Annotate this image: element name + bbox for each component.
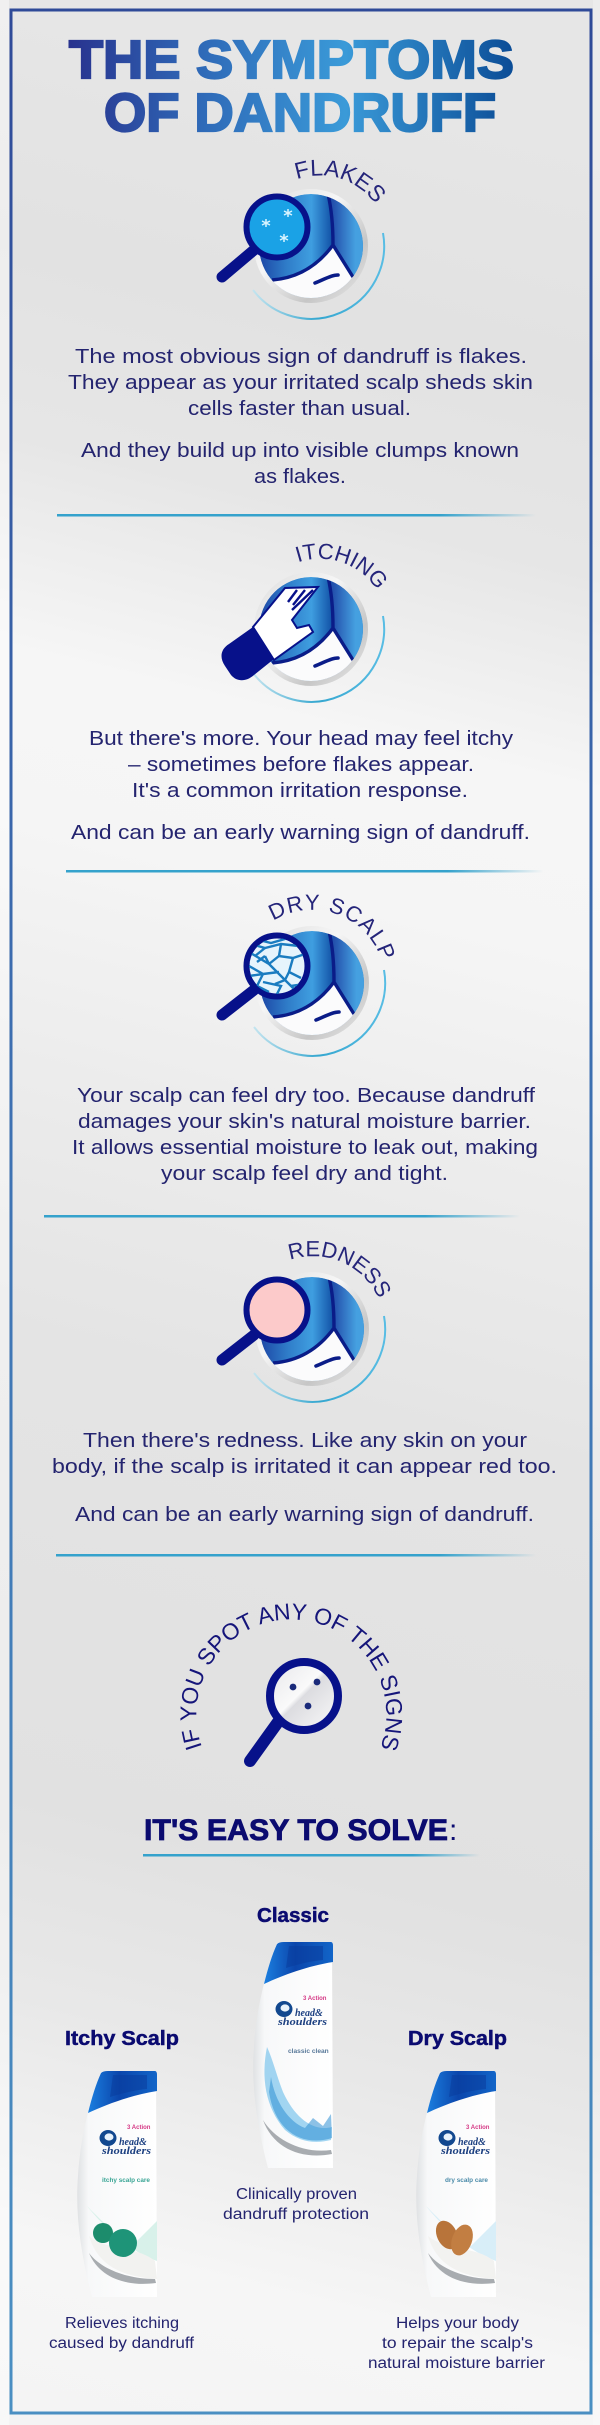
caption: itchy scalp: Relieves itching [65, 2315, 179, 2332]
icon: cracked skin magnifier over head [222, 923, 385, 1056]
text block: flakes: The most obvious sign of dandruff is flakes. [75, 345, 527, 368]
text block: redness [52, 1429, 557, 1526]
heading: dry scalp: DRY SCALP [268, 894, 394, 956]
callout: if you spot any of the signs [180, 1604, 402, 1767]
icon: magnifier with flakes [250, 1662, 338, 1761]
text block: itching: – sometimes before flakes appear. [128, 753, 474, 776]
heading: it's easy to solve: IT'S EASY TO SOLVE [144, 1814, 448, 1847]
text block: dry scalp: It allows essential moisture to leak out, making [72, 1136, 538, 1159]
bottle: dry scalp: dry scalp care [445, 2177, 488, 2184]
text block: dry scalp: damages your skin's natural moisture barrier. [78, 1110, 531, 1133]
bottle: dry scalp [416, 2071, 496, 2297]
icon: flakes magnifier over head [222, 186, 384, 319]
icon: hand scratching head [222, 569, 384, 702]
panel: redness [52, 1241, 557, 1526]
text block: redness: And can be an early warning sign of dandruff. [75, 1503, 534, 1526]
text block: itching: And can be an early warning sign of dandruff. [71, 821, 530, 844]
heading: itching: ITCHING [296, 544, 386, 588]
panel: flakes [68, 160, 533, 488]
caption: itchy scalp [49, 2315, 195, 2352]
title: OF DANDRUFF [104, 83, 496, 143]
curved heading: IF YOU SPOT ANY OF THE SIGNS [180, 1604, 402, 1750]
bottle: itchy scalp [77, 2071, 157, 2297]
text block: dry scalp: your scalp feel dry and tight. [161, 1162, 448, 1185]
caption: classic: Clinically proven [236, 2186, 357, 2203]
heading: itchy scalp: Itchy Scalp [65, 2028, 179, 2050]
bottle: classic: classic clean [288, 2048, 329, 2055]
heading: it's easy to solve: : [449, 1814, 457, 1847]
icon: red skin magnifier over head [222, 1269, 385, 1402]
text block: itching: But there's more. Your head may feel itchy [89, 727, 514, 750]
caption: classic: dandruff protection [223, 2206, 369, 2223]
panel: dry scalp [72, 894, 538, 1185]
panel: dry scalp product [368, 2028, 545, 2372]
heading: redness: REDNESS [288, 1241, 390, 1296]
heading: flakes: FLAKES [294, 160, 385, 202]
text block: flakes: cells faster than usual. [188, 397, 411, 420]
panel: itchy scalp product [49, 2028, 195, 2352]
text block: flakes: They appear as your irritated scalp sheds skin [68, 371, 533, 394]
text block: redness: body, if the scalp is irritated it can appear red too. [52, 1455, 557, 1478]
text block: itching [71, 727, 530, 844]
text block: flakes [68, 345, 533, 488]
caption: dry scalp product: natural moisture barrier [368, 2355, 545, 2372]
caption: dry scalp product: to repair the scalp's [382, 2335, 533, 2352]
title: THE SYMPTOMS [69, 30, 514, 90]
text block: itching: It's a common irritation response. [132, 779, 468, 802]
panel: itching [71, 544, 530, 844]
text block: dry scalp [72, 1084, 538, 1185]
panel: classic product [223, 1905, 369, 2223]
bottle: classic [253, 1942, 333, 2168]
text block: flakes: And they build up into visible clumps known [81, 439, 519, 462]
heading: dry scalp product: Dry Scalp [408, 2028, 507, 2050]
heading: classic: Classic [257, 1905, 329, 1927]
text block: dry scalp: Your scalp can feel dry too. Because dandruff [77, 1084, 535, 1107]
text block: flakes: as flakes. [254, 465, 346, 488]
caption: dry scalp product: Helps your body [396, 2315, 519, 2332]
bottle: itchy scalp: itchy scalp care [102, 2177, 150, 2184]
caption: dry scalp product [368, 2315, 545, 2372]
caption: classic [223, 2186, 369, 2223]
caption: itchy scalp: caused by dandruff [49, 2335, 195, 2352]
text block: redness: Then there's redness. Like any skin on your [83, 1429, 527, 1452]
title [69, 30, 514, 143]
